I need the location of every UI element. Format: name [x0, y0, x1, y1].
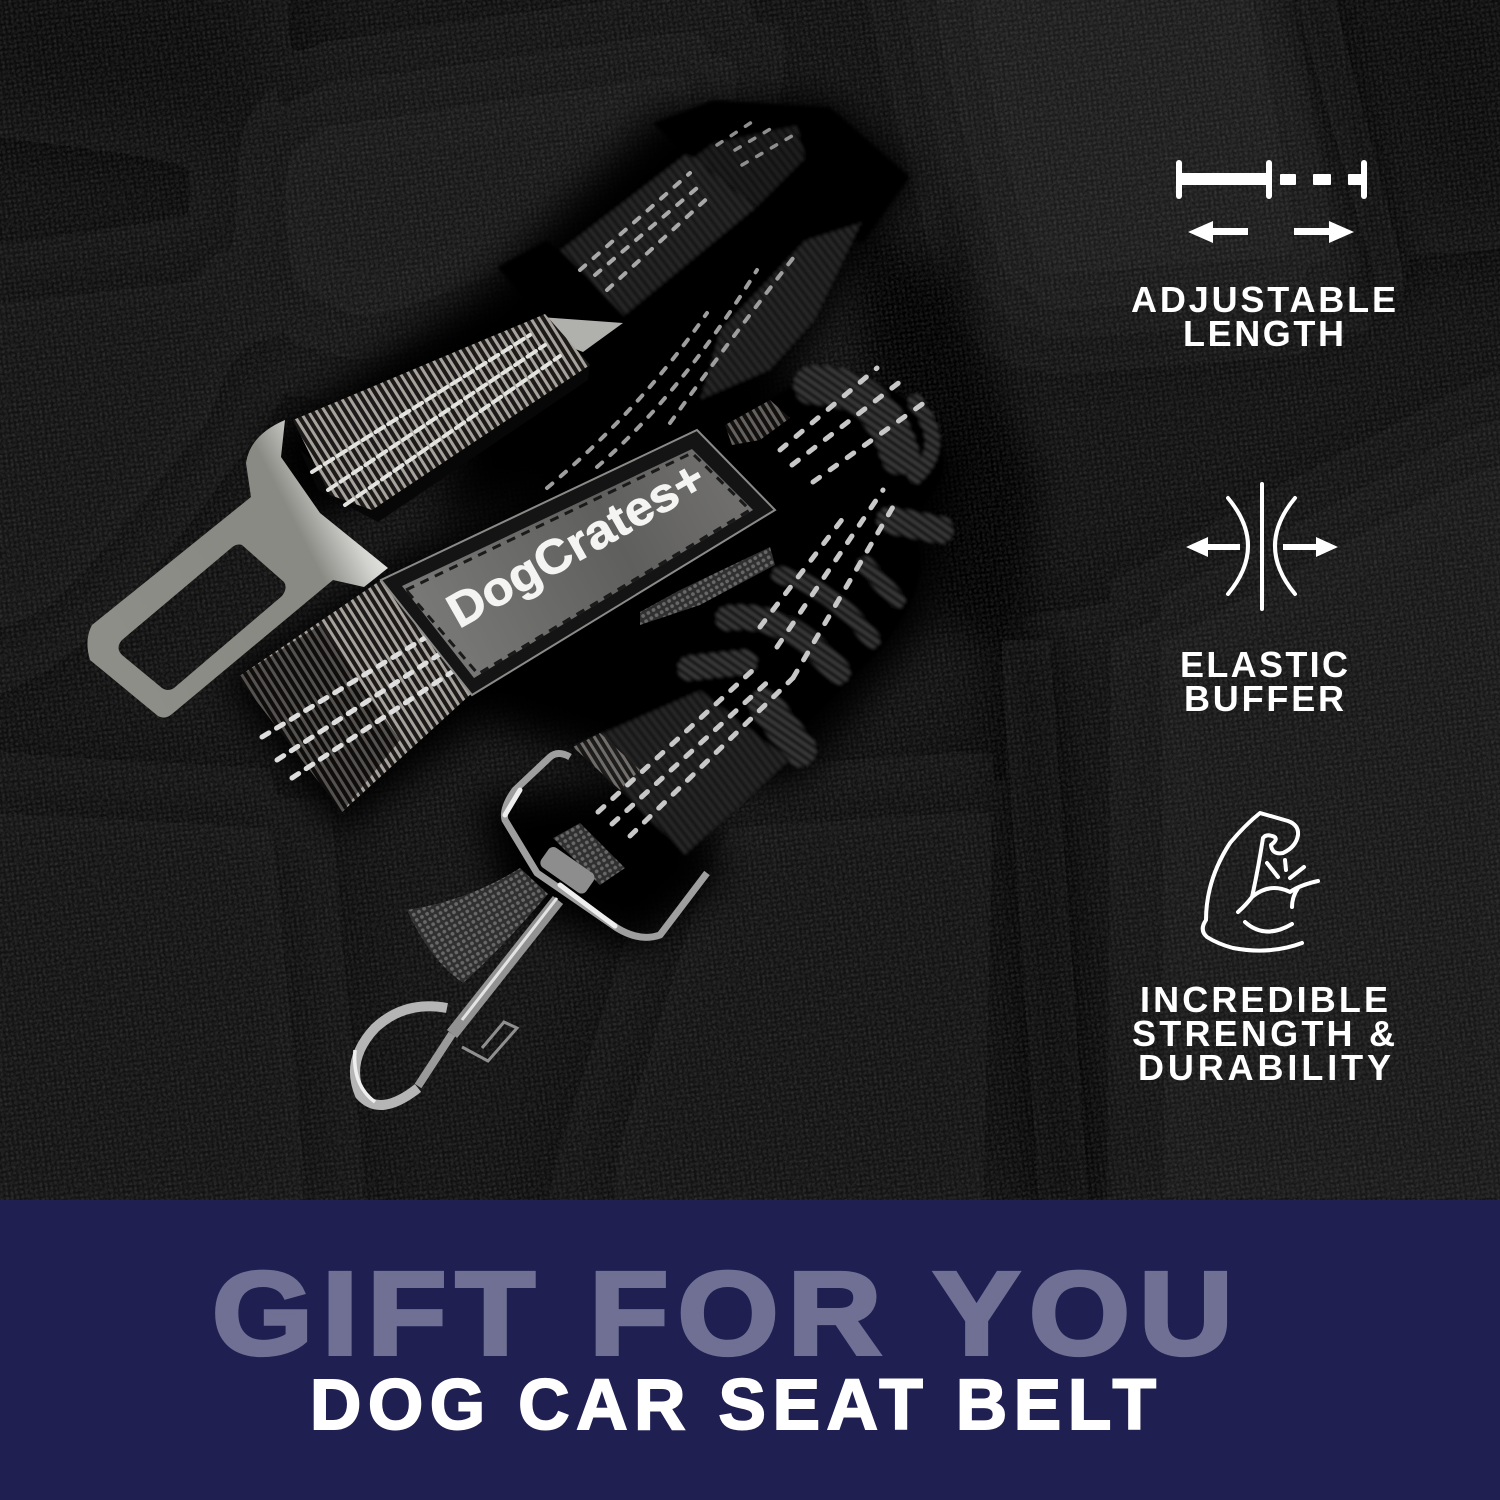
icon: adjustable length ruler and arrows [1176, 160, 1367, 243]
label: incredible strength and durability: INCREDIBLE [1140, 979, 1388, 1020]
subheading: dog car seat belt: DOG CAR SEAT BELT [310, 1366, 1156, 1445]
metal buckle [87, 420, 388, 718]
top strap loop [497, 100, 910, 320]
label: incredible strength and durability: DURABILITY [1138, 1047, 1391, 1088]
label: adjustable length: LENGTH [1183, 313, 1344, 354]
feature: elastic buffer [1180, 482, 1348, 719]
lower lit strap [238, 580, 472, 812]
label: incredible strength and durability [1132, 979, 1395, 1088]
snap hook and D-ring [355, 754, 707, 1105]
product photo: dog seat belt [87, 100, 955, 1105]
leather patch with logo [381, 430, 775, 695]
label: incredible strength and durability: STRENGTH & [1132, 1013, 1395, 1054]
label: elastic buffer [1180, 644, 1348, 719]
feature: adjustable length [1131, 160, 1396, 354]
belt shadow [225, 100, 955, 950]
label: elastic buffer: BUFFER [1184, 678, 1344, 719]
label: adjustable length: ADJUSTABLE [1131, 279, 1396, 320]
icon: flexed arm [1203, 813, 1318, 951]
label: adjustable length [1131, 279, 1396, 354]
long stitched strap [547, 222, 862, 488]
upper lit strap [293, 314, 590, 522]
feature: incredible strength and durability [1132, 813, 1395, 1088]
coiled elastic bungee section [573, 368, 945, 855]
silver buckle tang [540, 317, 623, 352]
icon: elastic buffer arcs and arrows [1186, 482, 1338, 611]
bottom banner [0, 1200, 1500, 1500]
label: elastic buffer: ELASTIC [1180, 644, 1348, 685]
heading: gift for you: GIFT FOR YOU [212, 1248, 1233, 1380]
logo: DogCrates+: DogCrates+ [438, 451, 714, 639]
